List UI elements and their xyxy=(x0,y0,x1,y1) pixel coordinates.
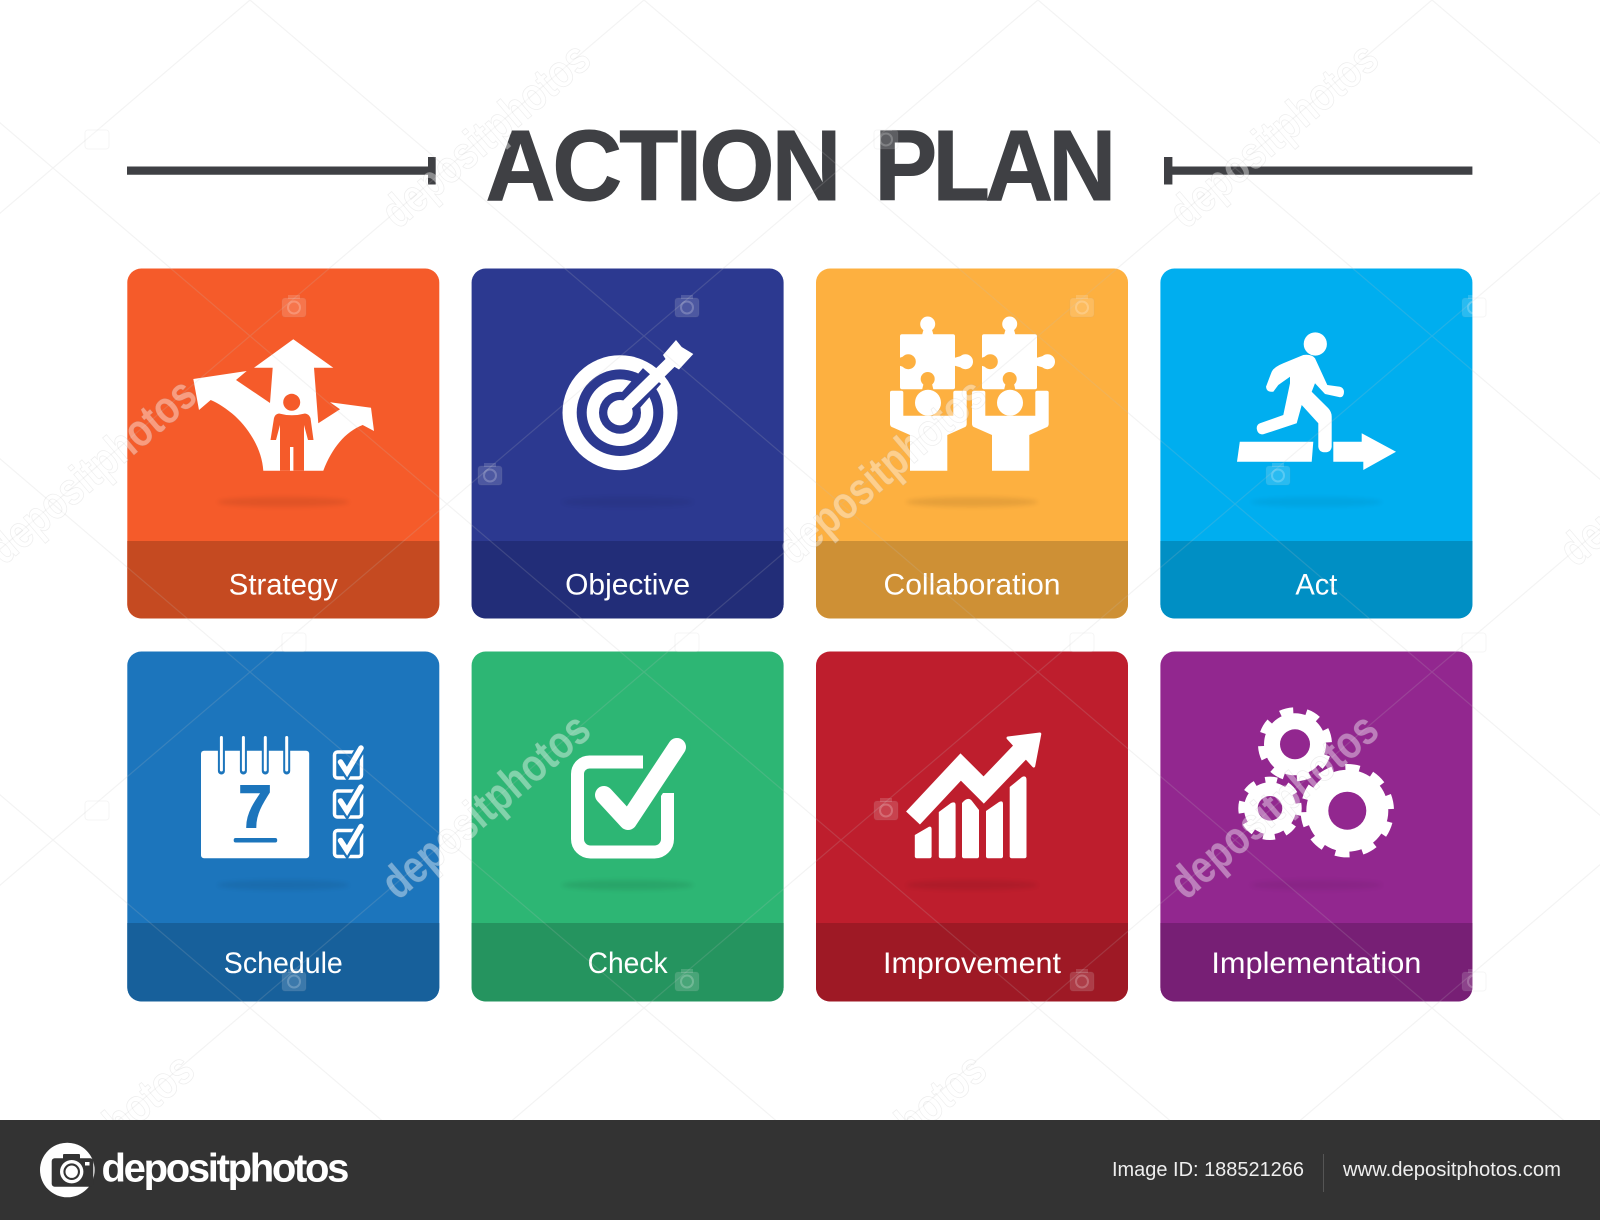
panel: objective xyxy=(472,268,784,618)
icon: camera logo xyxy=(40,1143,95,1197)
panel: improvement xyxy=(816,652,1128,1002)
icon: running person on step with arrow xyxy=(1237,332,1396,470)
title text: PLAN xyxy=(874,110,1112,222)
label: Schedule: Schedule xyxy=(224,947,343,980)
watermark: diagonal wordmarks: depositphotos xyxy=(1159,702,1388,909)
panel: strategy xyxy=(127,268,439,618)
checklist item 2 xyxy=(334,787,362,817)
panel: implementation xyxy=(1160,652,1472,1002)
label: Improvement: Improvement xyxy=(883,947,1062,980)
calendar page: 7 xyxy=(238,773,272,840)
puzzle and person right xyxy=(972,316,1055,471)
checklist item 3 xyxy=(334,826,362,856)
label: Act: Act xyxy=(1295,568,1338,602)
footer url: www.depositphotos.com xyxy=(1342,1159,1561,1181)
right title rule xyxy=(1164,157,1472,184)
label: Strategy: Strategy xyxy=(229,568,338,602)
left title rule xyxy=(127,157,436,184)
icon: target with arrow xyxy=(562,340,693,470)
title text xyxy=(486,110,1112,222)
icon: three gears xyxy=(1238,700,1402,866)
title text: ACTION xyxy=(486,110,838,222)
footer bar xyxy=(0,1120,1600,1220)
icon: people holding puzzle pieces xyxy=(890,316,1055,471)
footer divider xyxy=(1323,1154,1324,1192)
footer wordmark: depositphotos xyxy=(102,1147,348,1191)
label: Collaboration: Collaboration xyxy=(884,568,1060,602)
icon: checkbox with tick xyxy=(578,747,677,852)
label: Check: Check xyxy=(588,947,669,980)
icon: rising bar chart with arrow xyxy=(913,734,1040,858)
panel: schedule xyxy=(127,652,439,1002)
checklist item 1 xyxy=(334,748,362,778)
icon: calendar with checklist xyxy=(201,738,362,858)
calendar page xyxy=(201,738,309,858)
panel: act xyxy=(1160,268,1472,618)
title: header row xyxy=(127,110,1472,222)
gear right xyxy=(1292,756,1402,866)
watermark: diagonal wordmarks: depositphotos xyxy=(767,367,996,574)
watermark: diagonal wordmarks: depositphotos xyxy=(371,702,600,909)
puzzle and person left xyxy=(890,316,973,471)
panel: collaboration xyxy=(816,268,1128,618)
label: Objective: Objective xyxy=(565,568,690,602)
gear top xyxy=(1251,700,1339,788)
watermark: small camera marks xyxy=(85,127,1486,991)
gear left xyxy=(1238,776,1302,840)
footer image id: Image ID: 188521266 xyxy=(1112,1159,1304,1181)
panel: check xyxy=(472,652,784,1002)
label: Implementation: Implementation xyxy=(1211,947,1421,980)
icon: diverging arrows with person xyxy=(193,339,374,471)
